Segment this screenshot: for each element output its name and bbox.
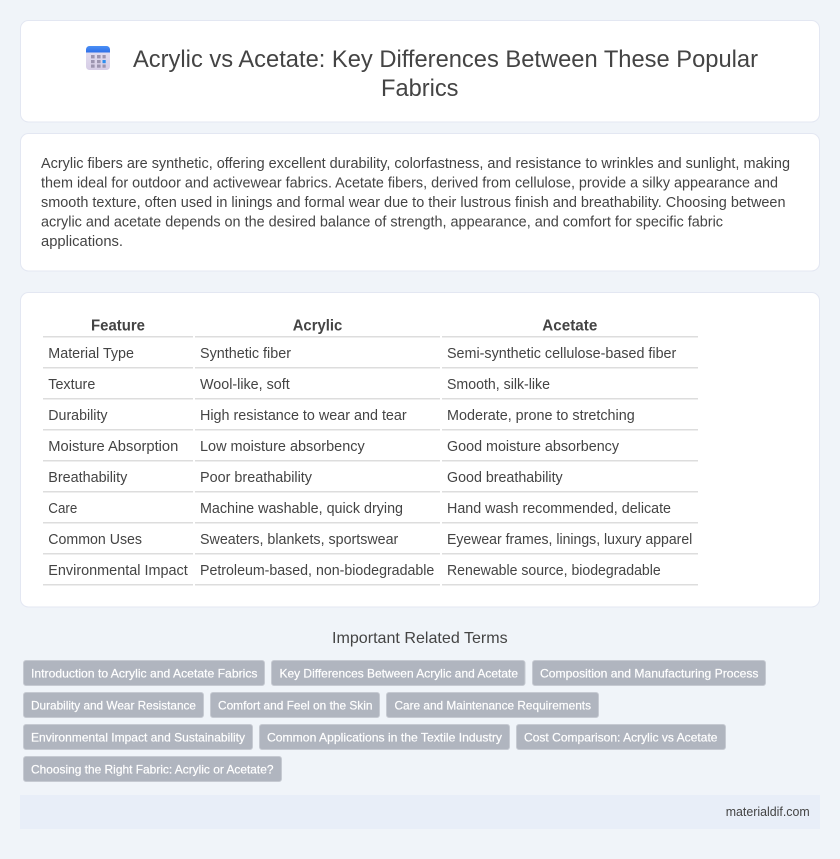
intro paragraph: acrylic and acetate depends on the desired balance of strength, appearance, and comfort for specific fabric	[41, 214, 723, 230]
title	[133, 46, 758, 102]
panel: title header	[20, 20, 820, 122]
row: common uses: Common Uses	[48, 532, 142, 548]
footer	[20, 795, 820, 829]
row: material type: Material Type	[48, 346, 134, 362]
row: breathability: Poor breathability	[200, 470, 313, 486]
related term tags: Comfort and Feel on the Skin	[218, 698, 372, 712]
row: texture	[43, 377, 698, 400]
row: common uses	[43, 532, 698, 554]
row: breathability: Good breathability	[447, 470, 563, 486]
related term tags: Cost Comparison: Acrylic vs Acetate	[524, 730, 718, 744]
row: moisture absorption: Good moisture absorbency	[447, 439, 620, 455]
related term tags: Key Differences Between Acrylic and Acetate	[280, 666, 518, 680]
footer: materialdif.com	[726, 804, 810, 819]
row: care: Machine washable, quick drying	[200, 501, 403, 517]
row: material type	[43, 346, 698, 368]
row: material type: Semi-synthetic cellulose-based fiber	[447, 346, 677, 362]
table header row: Feature	[91, 318, 145, 335]
row: common uses: Eyewear frames, linings, luxury apparel	[447, 532, 692, 548]
row: environmental impact: Petroleum-based, non-biodegradable	[200, 563, 434, 579]
panel: comparison table	[20, 292, 820, 607]
table header row: Acetate	[542, 318, 597, 335]
related term tags: Care and Maintenance Requirements	[394, 698, 591, 712]
row: durability: Moderate, prone to stretching	[447, 408, 635, 424]
row: texture: Texture	[48, 377, 95, 393]
related term tags: Environmental Impact and Sustainability	[31, 730, 245, 744]
row: durability: High resistance to wear and tear	[200, 408, 407, 424]
intro paragraph: smooth texture, often used in linings and formal wear due to their lustrous finish and breathability. Choosing between	[41, 195, 786, 211]
related term tags: Common Applications in the Textile Industry	[267, 730, 502, 744]
row: durability: Durability	[48, 408, 108, 424]
heading: important related terms: Important Related Terms	[332, 630, 508, 647]
row: texture: Wool-like, soft	[200, 377, 290, 393]
table header row: Acrylic	[293, 318, 342, 335]
intro paragraph	[41, 156, 790, 250]
row: care: Hand wash recommended, delicate	[447, 501, 671, 517]
row: common uses: Sweaters, blankets, sportswear	[200, 532, 398, 548]
table header row	[43, 318, 698, 338]
row: care: Care	[48, 501, 77, 517]
intro paragraph: them ideal for outdoor and activewear fabrics. Acetate fibers, derived from cellulose, provide a silky appearance and	[41, 176, 778, 192]
related term tags: Durability and Wear Resistance	[31, 698, 196, 712]
related term tags: Composition and Manufacturing Process	[540, 666, 758, 680]
related term tags: Choosing the Right Fabric: Acrylic or Acetate?	[31, 762, 274, 776]
intro paragraph: applications.	[41, 234, 123, 250]
title: Fabrics	[381, 75, 458, 102]
row: material type: Synthetic fiber	[200, 346, 291, 362]
row: environmental impact	[43, 563, 698, 586]
row: moisture absorption: Low moisture absorbency	[200, 439, 365, 455]
icon: calendar	[86, 46, 110, 70]
row: moisture absorption: Moisture Absorption	[48, 439, 178, 455]
intro paragraph: Acrylic fibers are synthetic, offering excellent durability, colorfastness, and resistance to wrinkles and sunlight, making	[41, 156, 790, 172]
row: care	[43, 501, 698, 524]
title: Acrylic vs Acetate: Key Differences Between These Popular	[133, 46, 758, 73]
row: breathability	[43, 470, 698, 492]
row: environmental impact: Environmental Impact	[48, 563, 188, 579]
row: environmental impact: Renewable source, biodegradable	[447, 563, 661, 579]
related term tags: Introduction to Acrylic and Acetate Fabrics	[31, 666, 258, 680]
panel: intro text	[20, 134, 820, 271]
row: breathability: Breathability	[48, 470, 128, 486]
related term tags	[24, 660, 766, 782]
row: moisture absorption	[43, 439, 698, 462]
row: texture: Smooth, silk-like	[447, 377, 550, 393]
row: durability	[43, 408, 698, 430]
